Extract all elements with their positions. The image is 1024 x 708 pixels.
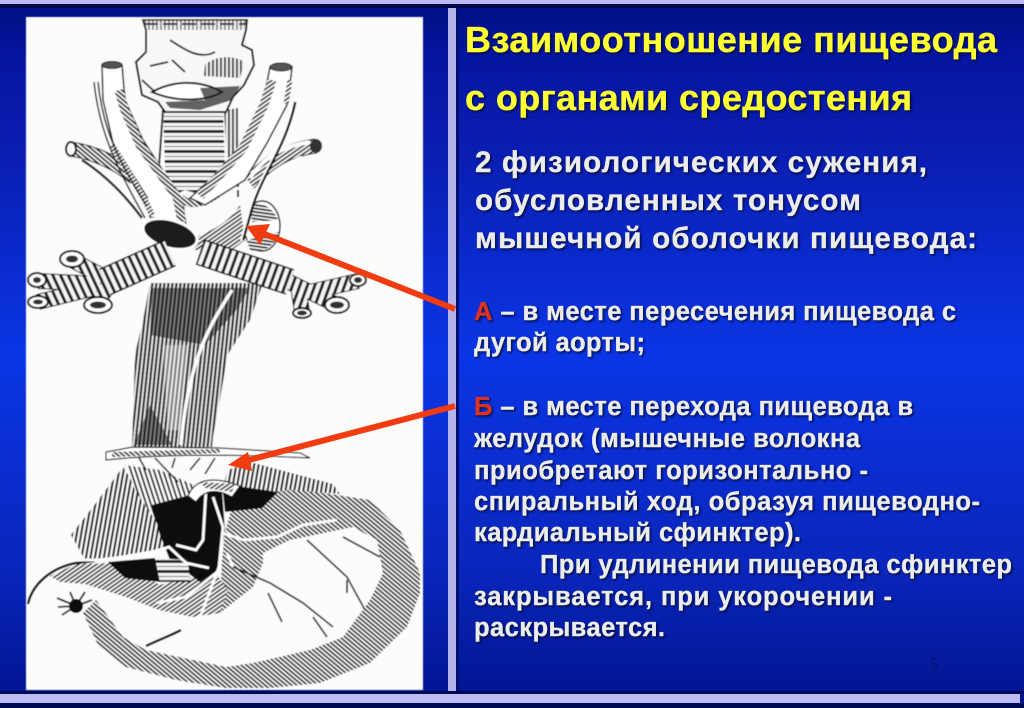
vertical divider bar: [448, 8, 459, 691]
trachea: [158, 108, 240, 196]
text block B: желудок (мышечные волокна: [473, 425, 861, 453]
dark mass behind vessels: [108, 484, 278, 582]
stomach dark inner lines: [233, 537, 380, 637]
text block A: дугой аорты;: [474, 329, 645, 357]
cardia fold: [138, 456, 240, 502]
subheading: 2 физиологических сужения,: [475, 146, 927, 179]
arrow A pointing to aortic arch: [246, 224, 455, 309]
stomach: [28, 488, 420, 688]
right main bronchus: [200, 252, 366, 318]
right carotid artery: [190, 63, 295, 240]
title: [465, 19, 998, 118]
bottom frame bar: [0, 691, 1024, 708]
larynx: [136, 20, 254, 112]
top frame bar: [0, 0, 1024, 8]
text block B: спиральный ход, образуя пищеводно-: [474, 488, 980, 516]
text block B: приобретают горизонтально -: [474, 457, 868, 485]
subheading: [475, 146, 977, 255]
descending aorta bulge: [244, 201, 280, 251]
text block sphincter note: При удлинении пищевода сфинктер: [540, 551, 1012, 579]
left main bronchus: [28, 251, 170, 313]
text block B: кардиальный сфинктер).: [474, 519, 801, 547]
title: с органами средостения: [465, 77, 912, 118]
pyloric tuft: [57, 592, 92, 615]
omentum fans: [71, 462, 340, 560]
aortic arch: [160, 160, 255, 250]
title: Взаимоотношение пищевода: [465, 19, 998, 60]
text block A: [474, 298, 956, 357]
left carotid artery: [94, 62, 186, 225]
esophagus: [132, 283, 263, 447]
text block sphincter note: раскрывается.: [474, 614, 665, 642]
text block sphincter note: [474, 551, 1012, 642]
text block A: А – в месте пересечения пищевода с: [474, 298, 956, 326]
text block B: [473, 393, 980, 547]
diaphragm band: [106, 447, 310, 460]
stomach vessels: [76, 490, 337, 620]
cut vessel opening: [139, 213, 201, 255]
subheading: обусловленных тонусом: [475, 184, 861, 217]
page number: 5: [929, 654, 938, 674]
right subclavian artery: [242, 139, 322, 205]
text block sphincter note: закрывается, при укорочении -: [474, 583, 892, 611]
anatomical illustration panel: [26, 17, 423, 690]
subheading: мышечной оболочки пищевода:: [475, 222, 977, 255]
arrow B pointing to cardia: [228, 406, 455, 471]
text block B: Б – в месте перехода пищевода в: [474, 393, 913, 421]
left subclavian artery: [66, 142, 142, 218]
